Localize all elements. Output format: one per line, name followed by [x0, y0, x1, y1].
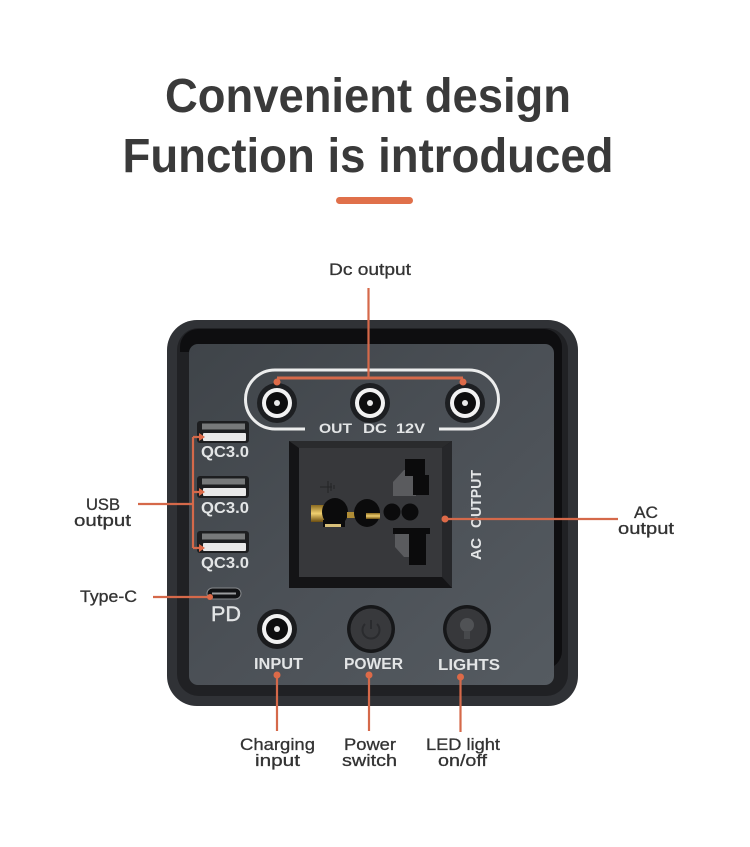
- callout: Type-C: [80, 587, 213, 606]
- AC output text: [468, 470, 485, 560]
- Type-C port: [207, 588, 241, 599]
- title: [122, 70, 614, 183]
- DC port text: 12V: [396, 420, 426, 436]
- callout: AC output: AC: [634, 503, 658, 522]
- earth symbol: [320, 481, 334, 493]
- callout: DC output: Dc output: [329, 260, 411, 279]
- upper earth slot: [393, 459, 429, 496]
- title: Convenient design: [165, 70, 571, 123]
- power button: [347, 605, 395, 653]
- callout: power switch: switch: [342, 751, 397, 770]
- AC socket: [289, 441, 452, 588]
- callout: USB output: output: [74, 511, 131, 530]
- device panel: [167, 320, 578, 706]
- USB port text: QC3.0: [201, 555, 249, 572]
- DC port text: OUT: [319, 420, 352, 436]
- DC output jacks: [257, 383, 485, 423]
- DC port group outline: [246, 370, 498, 429]
- callout: charging input: input: [255, 751, 300, 770]
- bottom port text: INPUT: [254, 656, 304, 673]
- title accent bar: [336, 197, 413, 204]
- input jack: [257, 609, 297, 649]
- title: Function is introduced: [122, 130, 614, 183]
- AC output text: AC: [468, 538, 485, 560]
- bottom port text: [254, 656, 500, 674]
- callout: USB output: [74, 433, 205, 552]
- callout: power switch: [342, 672, 397, 770]
- callout: AC output: output: [618, 519, 674, 538]
- callout: LED light: on/off: [438, 751, 487, 770]
- universal round holes: [311, 498, 418, 527]
- callout: LED light: LED light: [426, 735, 500, 754]
- DC port text: DC: [363, 420, 387, 436]
- callout: DC output: [274, 260, 466, 386]
- USB ports: [197, 421, 249, 553]
- bottom port text: POWER: [344, 656, 403, 673]
- lower earth slot: [393, 528, 430, 565]
- DC port text: [319, 420, 426, 436]
- USB port text: QC3.0: [201, 500, 249, 517]
- device casing: [167, 320, 578, 706]
- callout: AC output: [442, 503, 674, 538]
- bottom port text: LIGHTS: [438, 657, 500, 674]
- callout: charging input: [240, 672, 315, 770]
- callout: Type-C: Type-C: [80, 587, 137, 606]
- callout: USB output: USB: [86, 495, 120, 514]
- callout: power switch: Power: [344, 735, 396, 754]
- USB port text: [201, 444, 249, 572]
- PD text: PD: [211, 603, 241, 626]
- lights button: [443, 605, 491, 653]
- callout: LED light: [426, 674, 500, 770]
- callout: charging input: Charging: [240, 735, 315, 754]
- USB port text: QC3.0: [201, 444, 249, 461]
- AC output text: OUTPUT: [468, 470, 485, 528]
